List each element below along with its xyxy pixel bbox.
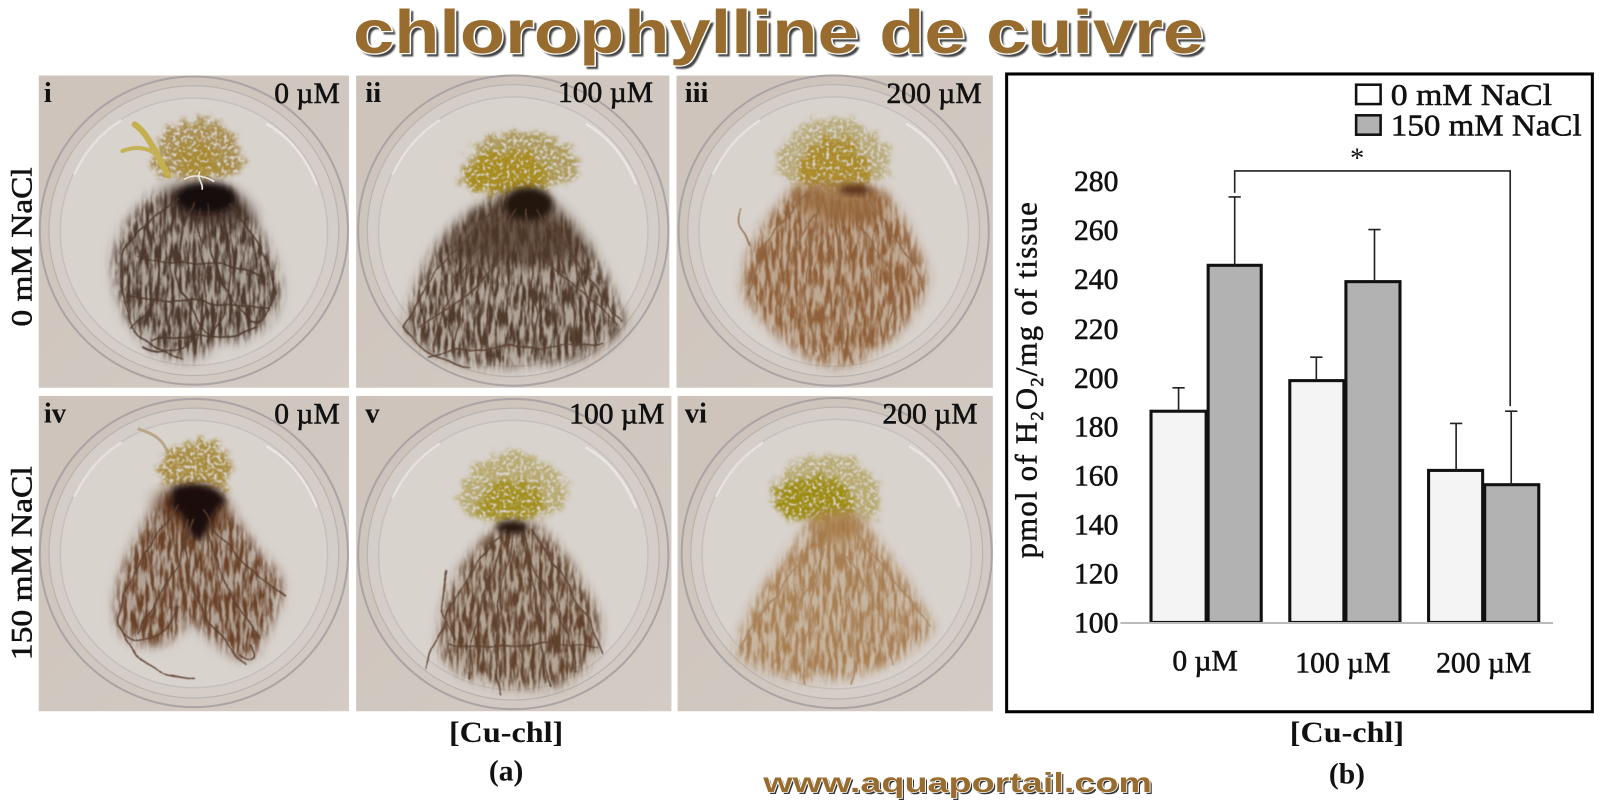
y axis ticks: 180 <box>1074 412 1118 444</box>
title: chlorophylline de cuivre <box>356 1 1207 69</box>
y axis title: /mg of tissue <box>1010 201 1044 376</box>
y axis ticks: 280 <box>1074 166 1118 198</box>
source url: www.aquaportail.com <box>762 767 1152 798</box>
y axis title: 2 <box>1027 410 1047 421</box>
bars <box>1151 265 1539 622</box>
panel: photo v <box>356 396 671 711</box>
caption: (a): (a) <box>489 756 523 788</box>
source url <box>762 767 1154 800</box>
label v: v <box>365 398 380 429</box>
y axis ticks: 220 <box>1074 314 1118 346</box>
panel: photo iv <box>39 396 349 711</box>
label 200 µM: 200 µM <box>882 398 978 430</box>
x axis line <box>1120 622 1553 624</box>
y axis ticks: 240 <box>1074 264 1118 296</box>
panel: photo vi <box>678 396 993 711</box>
x axis labels: 0 µM <box>1172 645 1238 677</box>
label vi: vi <box>685 398 707 429</box>
label i: i <box>44 78 52 109</box>
caption: [Cu-chl] left: [Cu-chl] <box>449 717 563 749</box>
y axis ticks: 120 <box>1074 559 1118 591</box>
y axis ticks: 160 <box>1074 461 1118 493</box>
y axis ticks <box>1074 166 1118 640</box>
label iv: iv <box>44 398 67 429</box>
label 0 µM: 0 µM <box>274 398 340 430</box>
label 200 µM: 200 µM <box>887 78 982 110</box>
significance bracket: * <box>1350 143 1364 174</box>
source url: www.aquaportail.com <box>762 767 1152 798</box>
significance bracket <box>1235 143 1510 406</box>
label 100 µM: 100 µM <box>569 398 664 430</box>
x axis labels: 100 µM <box>1295 647 1390 679</box>
label ii: ii <box>365 78 381 109</box>
caption: (b): (b) <box>1329 759 1365 791</box>
row label: 0 mM NaCl: 0 mM NaCl <box>7 167 39 327</box>
source url: www.aquaportail.com <box>764 769 1154 800</box>
label 0 µM: 0 µM <box>274 78 340 110</box>
y axis title: pmol of H <box>1010 421 1044 558</box>
panel: photo i <box>39 76 349 388</box>
legend <box>1356 78 1582 143</box>
panel: photo ii <box>356 76 669 388</box>
x axis labels: 200 µM <box>1436 647 1531 679</box>
title: chlorophylline de cuivre <box>353 0 1204 66</box>
caption: [Cu-chl] right: [Cu-chl] <box>1290 717 1404 749</box>
x axis labels <box>1172 645 1531 679</box>
legend: 150 mM NaCl <box>1391 109 1582 143</box>
row label: 150 mM NaCl: 150 mM NaCl <box>7 466 39 660</box>
y axis ticks: 260 <box>1074 215 1118 247</box>
panel: photo iii <box>677 76 993 388</box>
y axis title: 2 <box>1027 376 1047 387</box>
y axis ticks: 200 <box>1074 363 1118 395</box>
y axis title: O <box>1010 387 1044 410</box>
panel: bar chart frame <box>1007 74 1592 712</box>
label iii: iii <box>685 78 709 109</box>
label 100 µM: 100 µM <box>558 77 653 109</box>
y axis ticks: 140 <box>1074 510 1118 542</box>
y axis ticks: 100 <box>1074 608 1118 640</box>
title: chlorophylline de cuivre <box>353 0 1204 66</box>
legend: 0 mM NaCl <box>1391 78 1552 112</box>
error bars <box>1172 197 1517 485</box>
